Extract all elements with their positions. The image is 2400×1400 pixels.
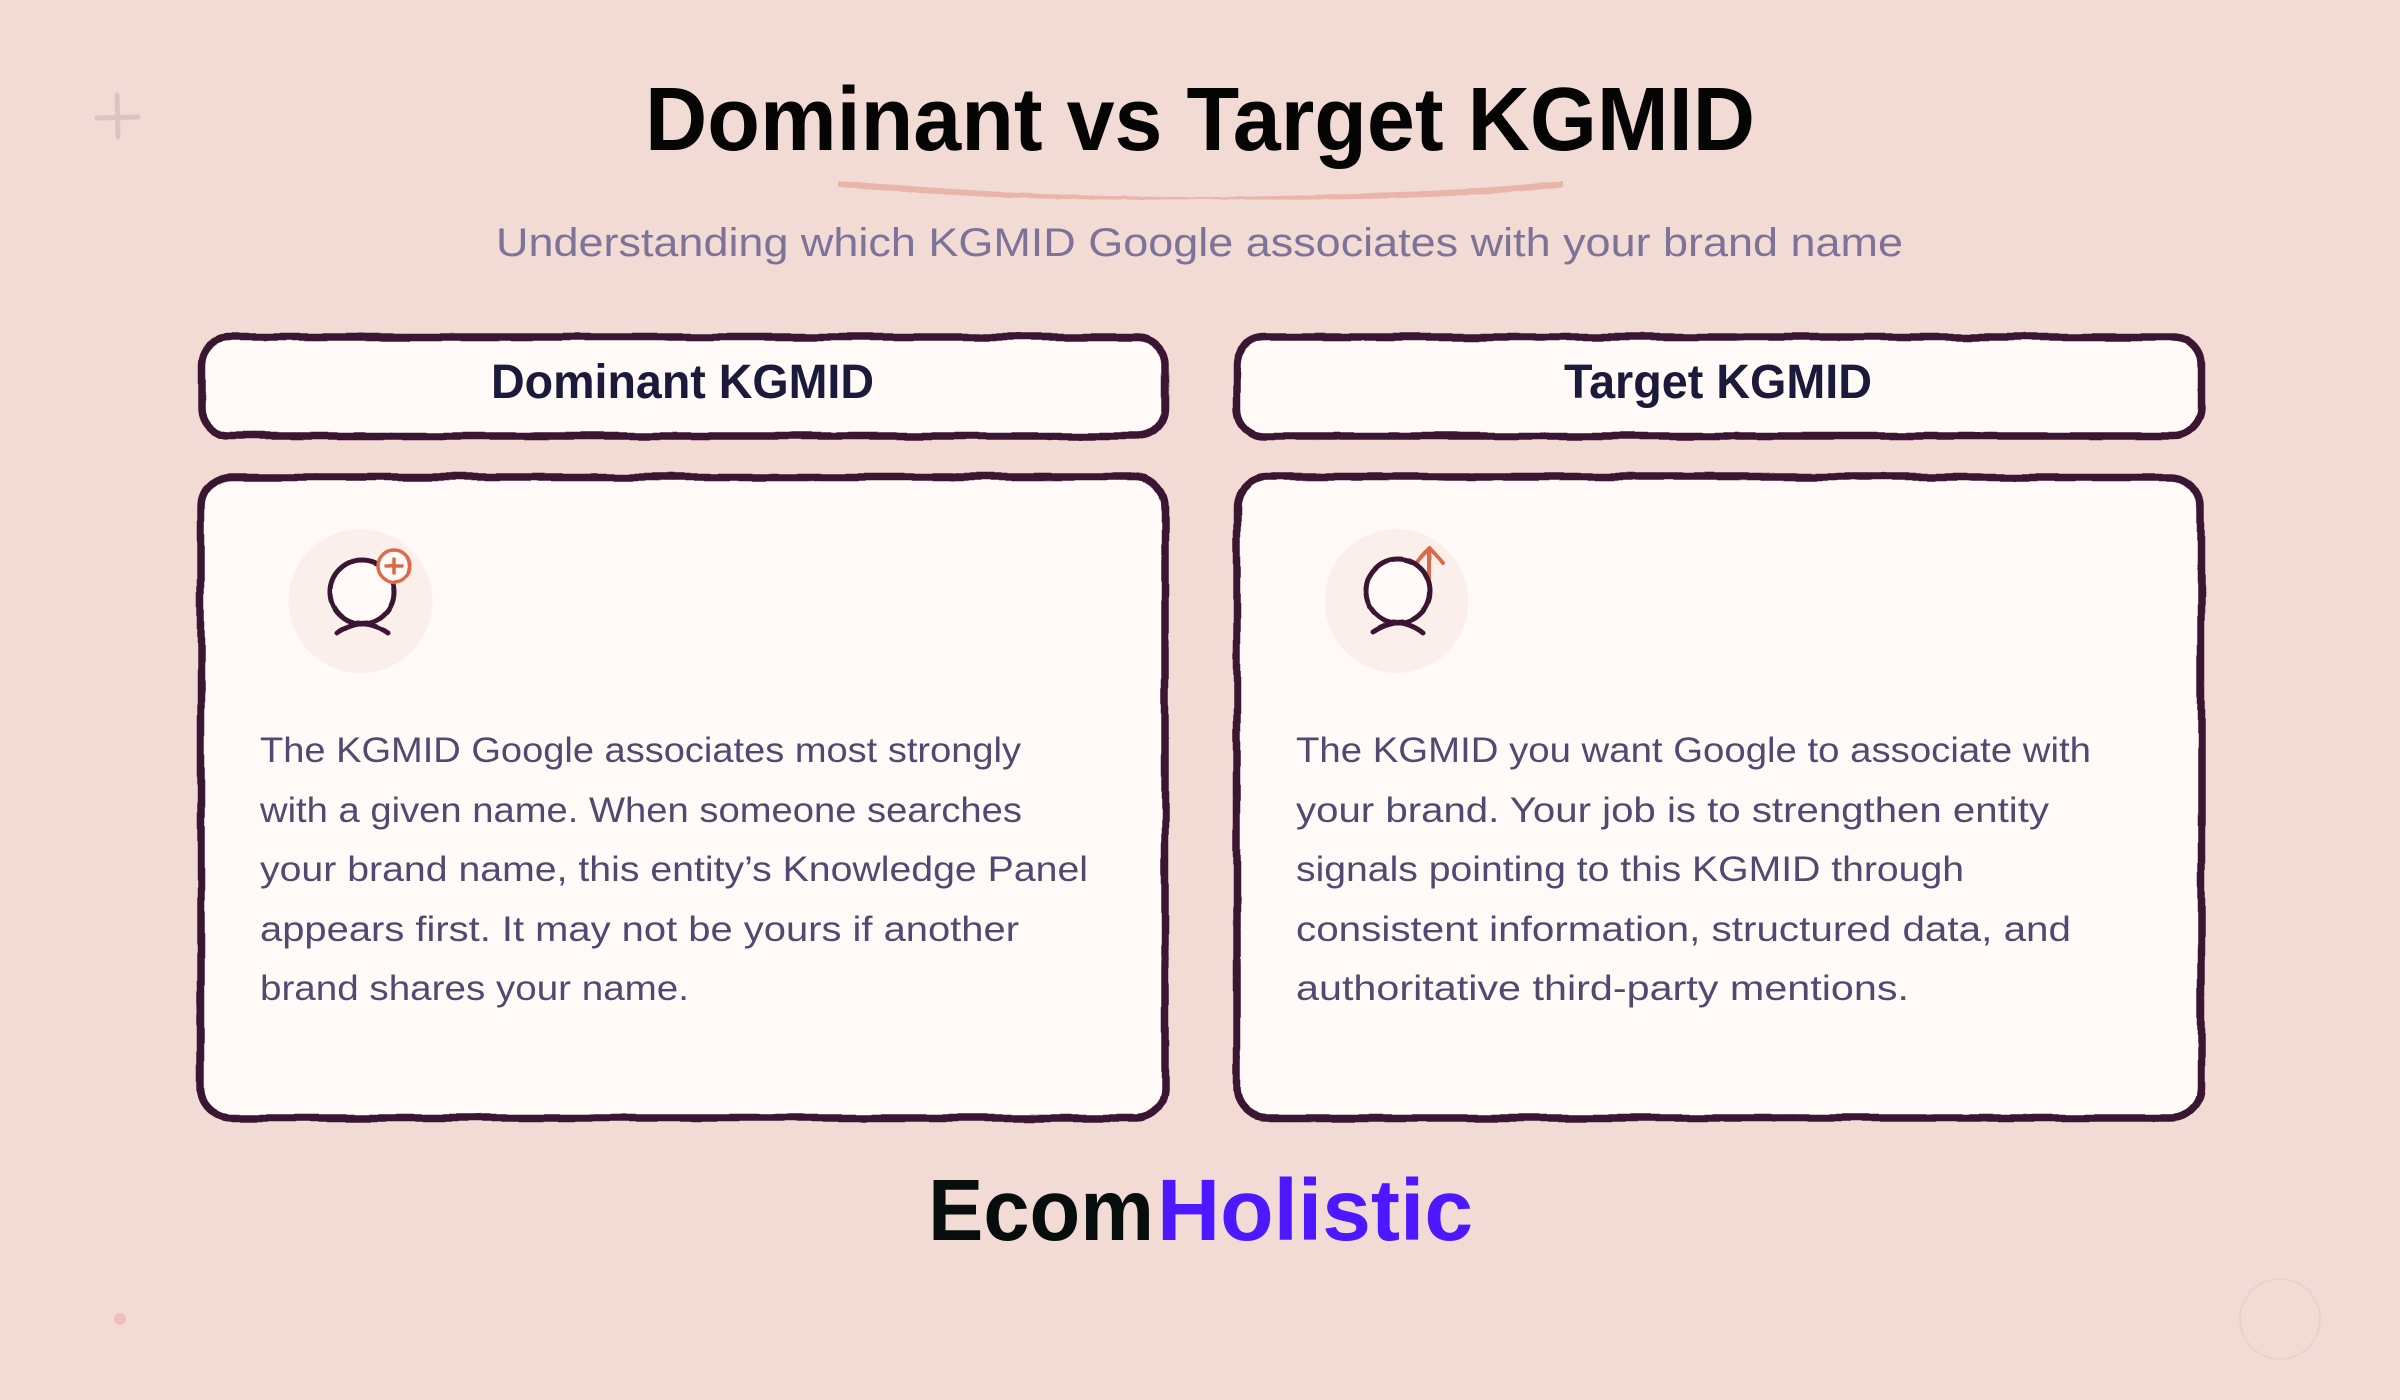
dominant KGMID body text <box>259 730 1088 1008</box>
target KGMID body text: your brand. Your job is to strengthen entity <box>1296 790 2049 830</box>
dominant KGMID body text: with a given name. When someone searches <box>259 790 1022 830</box>
icon: person with up arrow <box>1324 529 1468 673</box>
dominant heading: Dominant KGMID <box>491 356 874 409</box>
brand logo <box>928 1162 1473 1259</box>
target KGMID body text: authoritative third-party mentions. <box>1296 968 1909 1008</box>
panel: target header <box>1237 337 2201 436</box>
target heading: Target KGMID <box>1564 356 1872 409</box>
icon: person with plus badge <box>288 529 432 673</box>
panel: dominant header <box>201 337 1165 436</box>
target KGMID body text: consistent information, structured data, and <box>1296 909 2071 949</box>
decoration: plus mark <box>97 95 138 137</box>
dominant KGMID body text: appears first. It may not be yours if another <box>260 909 1019 949</box>
decoration: small dot <box>114 1313 126 1325</box>
title: Dominant vs Target KGMID <box>645 70 1755 170</box>
dominant KGMID body text: brand shares your name. <box>260 968 689 1008</box>
panel: dominant KGMID description <box>201 477 1165 1118</box>
subtitle: Understanding which KGMID Google associates with your brand name <box>496 221 1903 265</box>
target KGMID body text: The KGMID you want Google to associate with <box>1296 730 2091 770</box>
dominant KGMID body text: your brand name, this entity’s Knowledge Panel <box>260 849 1088 889</box>
panel: target KGMID description <box>1237 477 2201 1118</box>
brand logo: Holistic <box>1157 1162 1473 1259</box>
target KGMID body text: signals pointing to this KGMID through <box>1296 849 1964 889</box>
dominant KGMID body text: The KGMID Google associates most strongly <box>260 730 1021 770</box>
brand logo: Ecom <box>928 1162 1154 1259</box>
target KGMID body text <box>1296 730 2091 1008</box>
decoration: outlined circle <box>2240 1279 2320 1359</box>
title underline <box>838 181 1563 200</box>
